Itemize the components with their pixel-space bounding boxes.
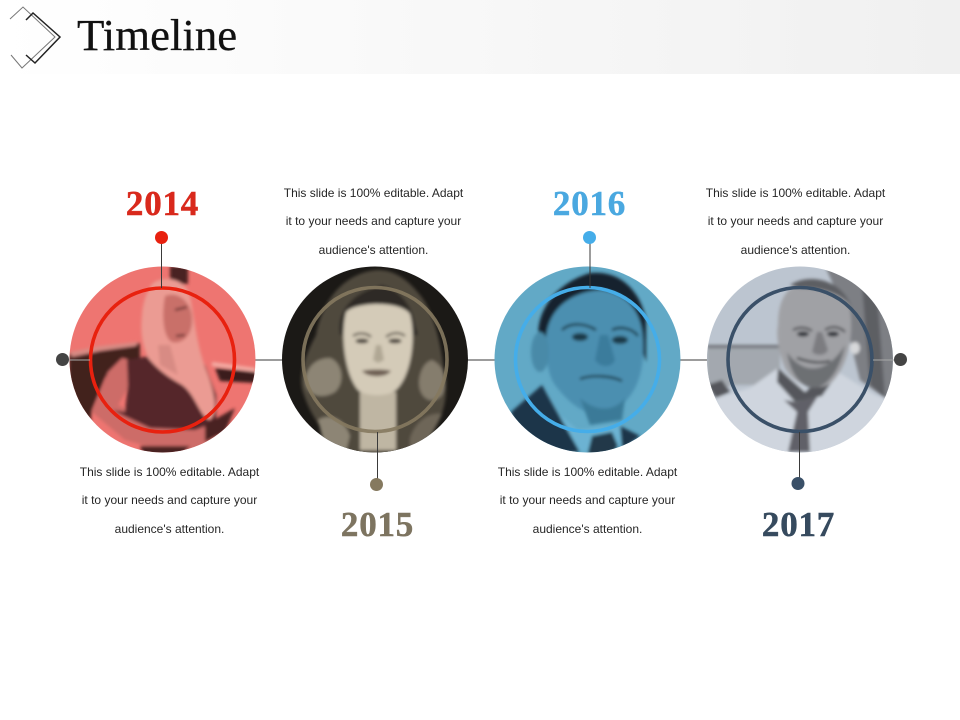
connector to 2017 dot xyxy=(798,432,800,484)
year 2016: 2016 xyxy=(553,184,626,223)
panel: 2017 xyxy=(706,186,907,544)
year 2014: 2014 xyxy=(126,184,199,223)
portrait: 2014 woman xyxy=(69,266,256,458)
title: Timeline xyxy=(77,10,237,60)
text 2014: audience's attention. xyxy=(115,522,224,536)
right end connector xyxy=(873,359,900,361)
portrait: 2015 woman xyxy=(282,266,469,455)
text 2015: it to your needs and capture your xyxy=(286,214,461,228)
connector to 2014 dot xyxy=(160,238,162,288)
connector to 2016 dot xyxy=(589,238,591,288)
right end dot xyxy=(894,353,907,366)
portrait: 2017 man xyxy=(707,266,895,455)
text 2017: This slide is 100% editable. Adapt xyxy=(706,186,886,200)
ring 2016 xyxy=(516,288,660,432)
year 2017: 2017 xyxy=(762,505,835,544)
text 2016: it to your needs and capture your xyxy=(500,493,675,507)
text 2016 xyxy=(498,465,678,536)
text 2017: it to your needs and capture your xyxy=(708,214,883,228)
icon: chevron logo xyxy=(10,7,60,68)
left end connector xyxy=(62,359,90,361)
ring 2017 xyxy=(728,288,872,432)
header band xyxy=(0,0,960,74)
panel: 2015 xyxy=(282,186,469,544)
text 2015 xyxy=(284,186,464,257)
dot 2017 xyxy=(792,477,804,490)
text 2016: This slide is 100% editable. Adapt xyxy=(498,465,678,479)
timeline connector lines xyxy=(235,359,727,361)
ring 2015 xyxy=(303,288,447,432)
text 2014: it to your needs and capture your xyxy=(82,493,257,507)
text 2015: audience's attention. xyxy=(319,243,428,257)
text 2015: This slide is 100% editable. Adapt xyxy=(284,186,464,200)
portrait: 2016 man xyxy=(494,266,681,455)
text 2014 xyxy=(80,465,260,536)
panel: 2014 xyxy=(56,184,260,536)
dot 2015 xyxy=(370,478,383,491)
dot 2016 xyxy=(583,231,596,244)
year 2015: 2015 xyxy=(341,505,414,544)
ring 2014 xyxy=(90,288,234,432)
dot 2014 xyxy=(155,231,168,244)
text 2017 xyxy=(706,186,886,257)
text 2016: audience's attention. xyxy=(533,522,642,536)
text 2017: audience's attention. xyxy=(741,243,850,257)
left end dot xyxy=(56,353,69,366)
panel: 2016 xyxy=(494,184,681,536)
connector to 2015 dot xyxy=(376,432,378,484)
text 2014: This slide is 100% editable. Adapt xyxy=(80,465,260,479)
